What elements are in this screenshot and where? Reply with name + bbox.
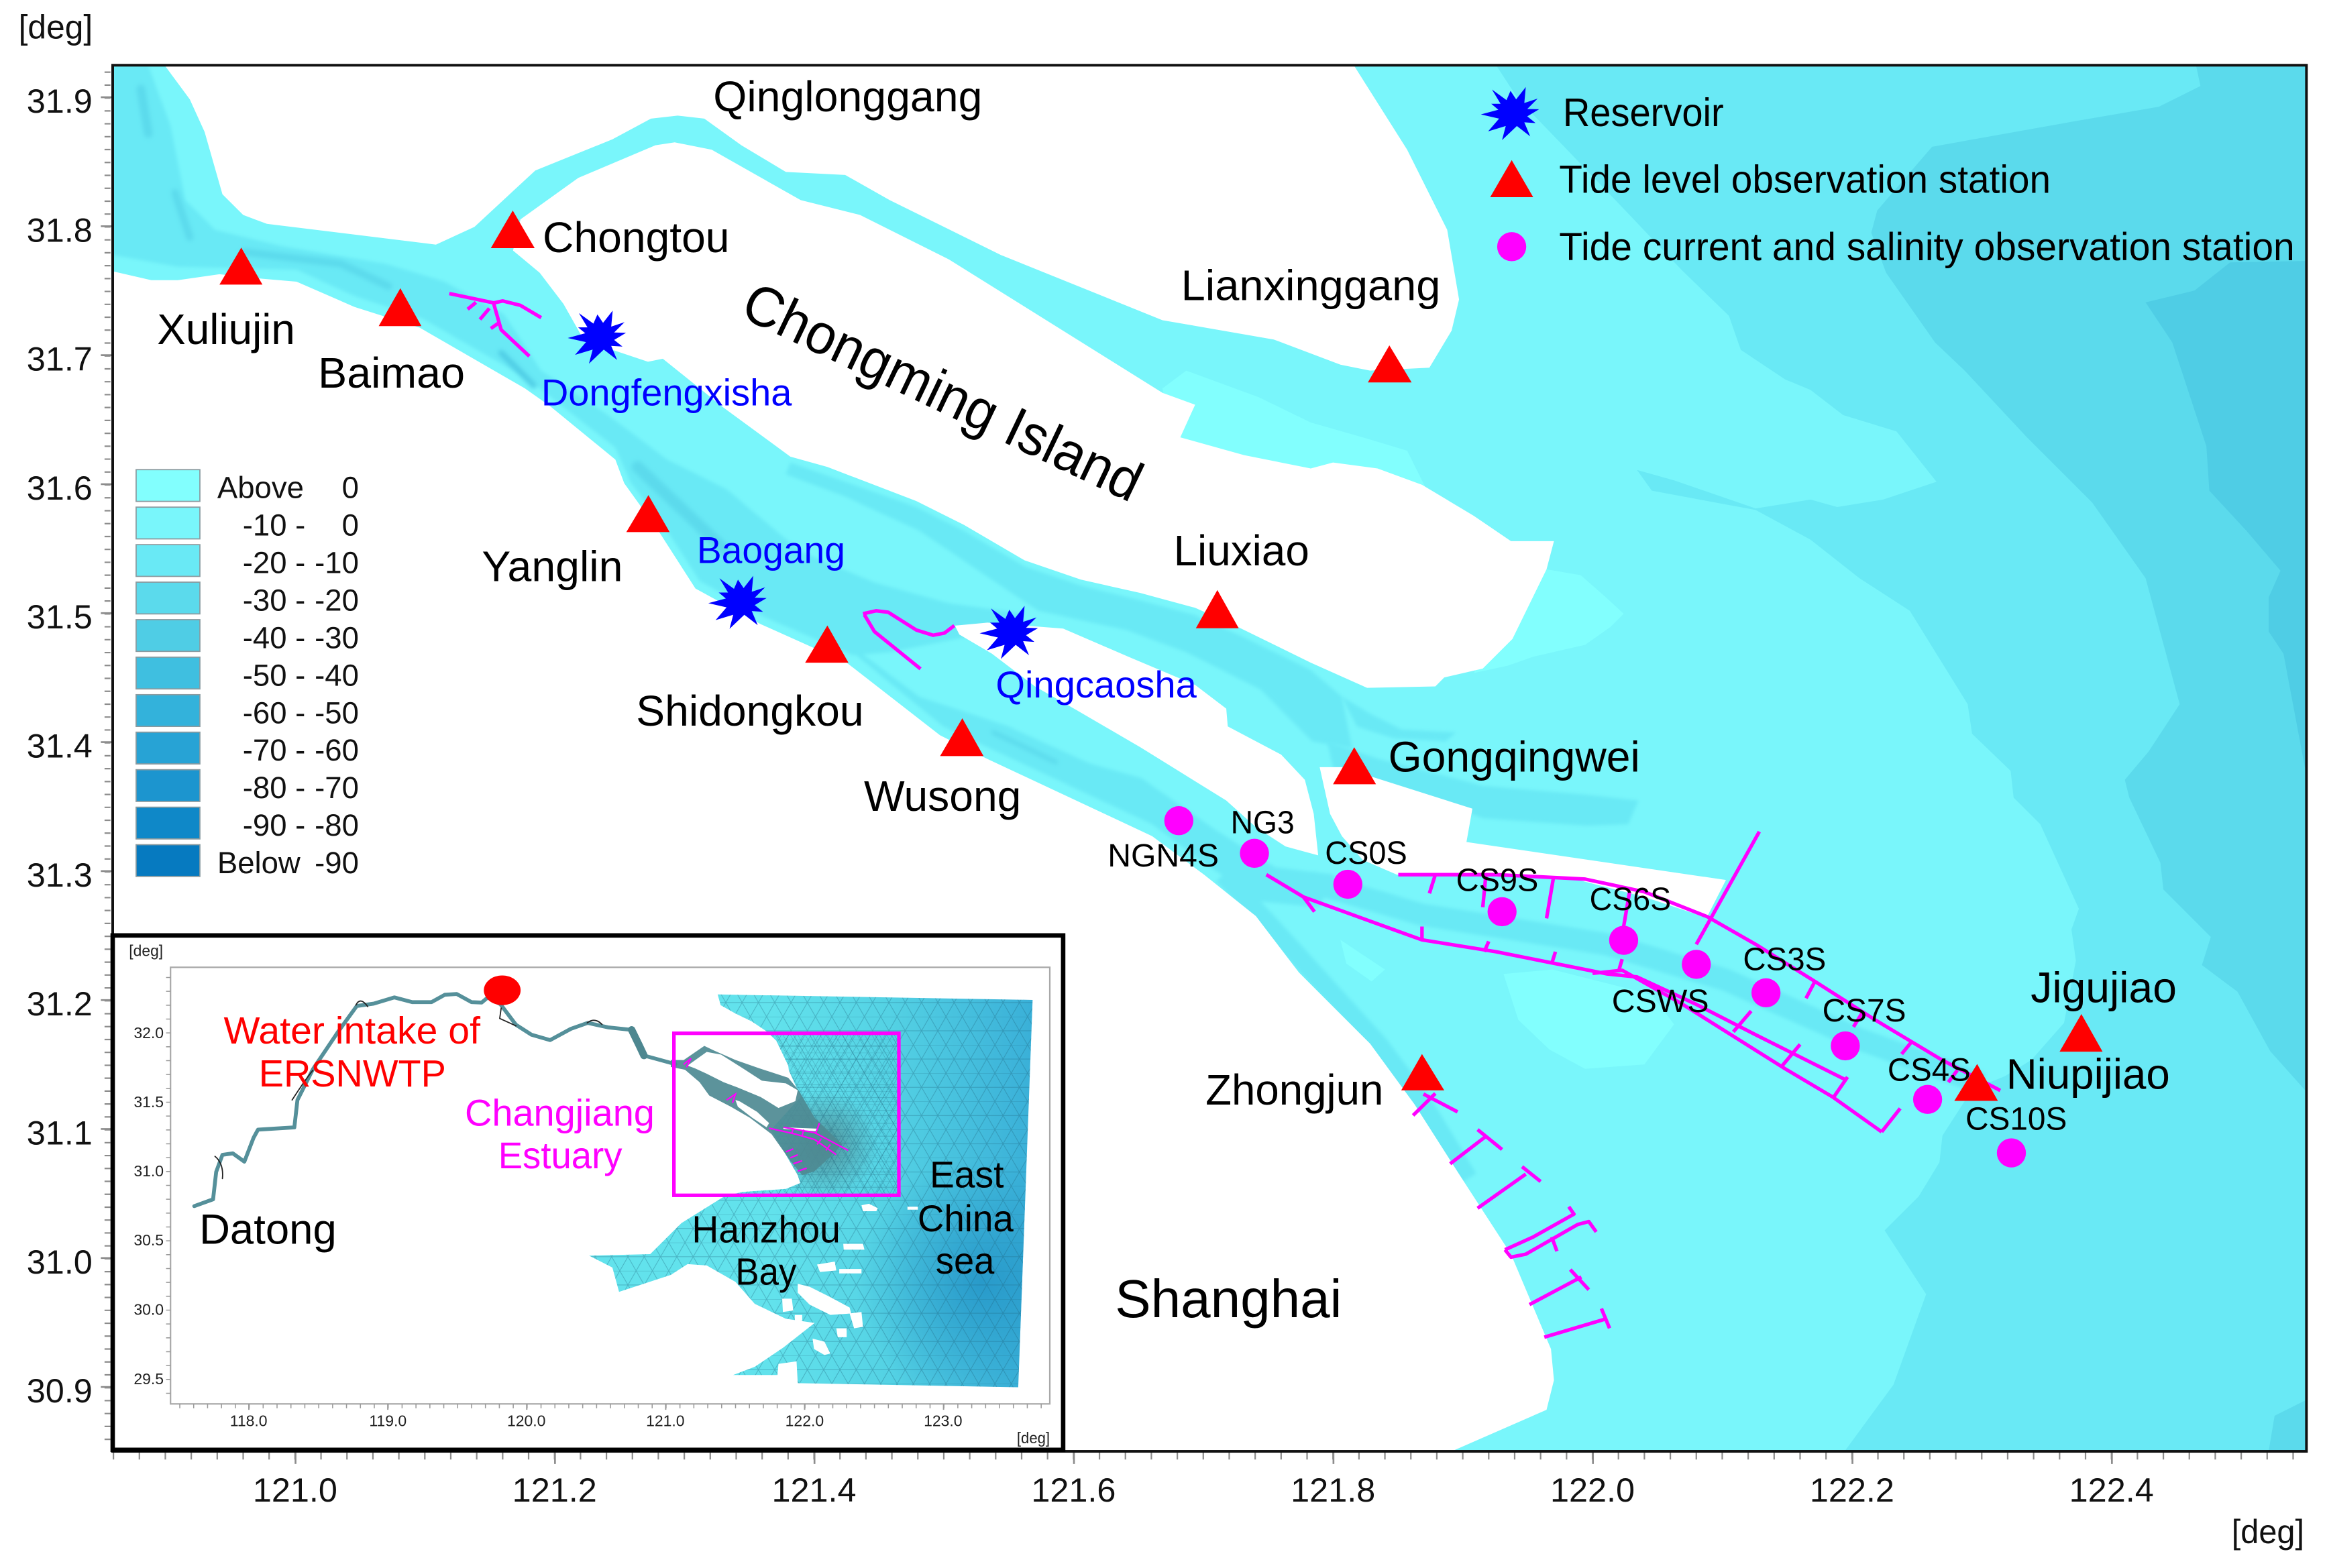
current and salinity station: CS9S <box>1456 862 1538 926</box>
river zone: south channel <box>763 611 1334 907</box>
reservoir: Dongfengxisha <box>541 311 792 413</box>
dikes: Deep Water Channel north dike <box>1398 832 2000 1090</box>
inset label: Hanzhou Bay: Hanzhou <box>692 1208 841 1250</box>
tide level station: Wusong <box>864 718 1021 820</box>
y axis labels: 31.3 <box>27 856 93 894</box>
reservoir: Qingcaosha <box>979 606 1197 706</box>
depth zone: -10 to 0 base water <box>114 66 2079 1450</box>
depth zone: -40 to -30 <box>2146 261 2307 780</box>
depth labels: -20 <box>315 583 359 617</box>
inset plot area <box>170 967 1050 1404</box>
current and salinity station: CS10S <box>1965 1101 2067 1168</box>
tide level station: Xuliujin: Xuliujin <box>157 305 295 353</box>
reservoir: Baogang: Baogang <box>697 528 845 571</box>
inset y labels: 32.0 <box>133 1024 164 1042</box>
river channel: deep zones <box>113 65 1982 1178</box>
legend item: reservoir <box>1481 87 1724 140</box>
tide level station: Baimao: Baimao <box>318 349 465 397</box>
tide level station: Liuxiao: Liuxiao <box>1174 526 1309 575</box>
inset label: East China sea <box>918 1154 1014 1282</box>
y axis labels: 30.9 <box>27 1371 93 1410</box>
inset x labels <box>230 1412 963 1429</box>
x axis labels: 121.0 <box>253 1471 337 1509</box>
inset y labels: 31.5 <box>133 1093 164 1111</box>
depth labels: -30 <box>315 620 359 655</box>
shoal: above 0 south of channel <box>1503 970 1674 1069</box>
depth labels: 0 <box>342 471 359 505</box>
mesh islands: Zhoushan archipelago <box>782 1204 918 1355</box>
depth labels: -90 <box>315 846 359 880</box>
training dikes and groynes <box>449 294 2000 1337</box>
inset x labels: 120.0 <box>507 1412 545 1429</box>
inset y labels: 30.5 <box>133 1231 164 1249</box>
fine mesh lines <box>673 1033 900 1196</box>
current and salinity station: CS10S: CS10S <box>1965 1101 2067 1137</box>
inset label: water intake: ERSNWTP <box>259 1052 446 1095</box>
tide level station: Baimao <box>318 288 465 397</box>
inset river: Yangtze from Datong <box>195 994 675 1206</box>
mesh depth shading <box>855 1156 1107 1408</box>
bank patch: -20 north of Hengsha <box>1342 697 1456 741</box>
bank patch: -20 south of Jiuduan <box>1327 741 1639 826</box>
current and salinity station: CSWS <box>1612 950 1711 1019</box>
land: Hengsha island <box>1319 767 1726 917</box>
current and salinity station: CS0S: CS0S <box>1325 835 1407 871</box>
y axis labels: 31.5 <box>27 598 93 636</box>
legend item: tide current and salinity station: Tide current and salinity observation station <box>1559 225 2295 269</box>
depth swatches <box>136 469 200 877</box>
tide level station: Zhongjun: Zhongjun <box>1205 1066 1383 1114</box>
tide level station: Lianxinggang: Lianxinggang <box>1181 262 1440 310</box>
depth labels: -60 <box>315 733 359 767</box>
river zone: north channel <box>786 463 1352 748</box>
legend: station symbols <box>1481 87 2295 269</box>
inset ticks <box>168 977 1050 1407</box>
shoal: above 0 east of Chongming <box>1474 569 1623 673</box>
reservoir: Baogang <box>697 528 845 629</box>
tide level station: Xuliujin <box>157 247 295 353</box>
inset frame <box>113 936 1063 1450</box>
inset x unit: [deg] <box>1017 1429 1050 1447</box>
land: Qingcaosha / Changxing island <box>955 622 1318 855</box>
inset x labels: 123.0 <box>924 1412 963 1429</box>
x axis labels: 121.2 <box>512 1471 597 1509</box>
tide level station: Wusong: Wusong <box>864 772 1021 820</box>
depth labels: -10 - <box>243 508 305 543</box>
tide level station: Gongqingwei: Gongqingwei <box>1389 732 1640 781</box>
inset label: Hanzhou Bay <box>692 1208 841 1293</box>
current and salinity station: NG3 <box>1231 804 1295 868</box>
depth zone: -30 to -20 <box>1872 65 2307 1093</box>
inset x labels: 119.0 <box>369 1412 407 1429</box>
tide level station: Shidongkou: Shidongkou <box>636 687 864 735</box>
land: south bank and Shanghai <box>113 272 1554 1451</box>
land: Chongming Island <box>513 142 1554 688</box>
x axis labels <box>253 1471 2154 1509</box>
tide level station: Jigujiao: Jigujiao <box>2031 963 2177 1011</box>
depth labels: Below <box>217 846 301 880</box>
current and salinity station: CS9S: CS9S <box>1456 862 1538 898</box>
y axis unit: [deg] <box>19 7 93 46</box>
place label: Shanghai: Shanghai <box>1115 1269 1342 1329</box>
depth zone: -30 corner <box>2269 1400 2305 1450</box>
inset label: East China sea: East <box>930 1154 1004 1196</box>
depth labels: -50 <box>315 695 359 730</box>
inset x labels: 121.0 <box>646 1412 685 1429</box>
current and salinity station: CS4S <box>1888 1052 1971 1114</box>
dikes: Baimao shoal <box>449 294 541 356</box>
legend item: tide level station: Tide level observation station <box>1559 158 2051 201</box>
inset label: Changjiang Estuary: Changjiang <box>465 1092 655 1134</box>
x axis labels: 122.2 <box>1810 1471 1894 1509</box>
current and salinity station: CS6S: CS6S <box>1590 881 1671 917</box>
depth labels: -90 - <box>243 808 305 842</box>
depth labels: -70 - <box>243 733 305 767</box>
water intake marker <box>484 975 521 1005</box>
x axis labels: 121.4 <box>772 1471 857 1509</box>
tide level station: Liuxiao <box>1174 526 1309 628</box>
depth zone: -20 to -10 <box>1496 65 2307 1451</box>
inset label: East China sea: sea <box>936 1240 995 1282</box>
inset estuary channels <box>671 1046 843 1175</box>
mesh refinement shading near estuary <box>771 1091 878 1198</box>
inset island: Hengsha <box>783 1127 817 1131</box>
current and salinity station: CS3S: CS3S <box>1743 942 1826 978</box>
depth labels: -40 <box>315 658 359 692</box>
current and salinity station: CS7S <box>1823 993 1906 1060</box>
shoal: small above 0 patch <box>1340 940 1385 981</box>
inset x labels: 122.0 <box>786 1412 824 1429</box>
inset island: Chongming <box>688 1052 798 1108</box>
inset y labels: 30.0 <box>133 1301 164 1319</box>
tide level station: Shidongkou <box>636 626 864 735</box>
y axis labels: 31.9 <box>27 82 93 120</box>
x axis labels: 122.4 <box>2069 1471 2154 1509</box>
y axis labels: 31.1 <box>27 1113 93 1152</box>
x axis labels: 122.0 <box>1550 1471 1635 1509</box>
current and salinity station: CSWS: CSWS <box>1612 983 1709 1019</box>
inset study area box <box>674 1033 899 1195</box>
dikes: Deep Water Channel south dike <box>1266 875 1900 1132</box>
inset label: Hanzhou Bay: Bay <box>735 1251 796 1293</box>
river zone: upper main channel <box>113 65 1023 655</box>
x axis labels: 121.8 <box>1291 1471 1375 1509</box>
current and salinity station: CS4S: CS4S <box>1888 1052 1971 1088</box>
y axis labels: 31.2 <box>27 985 93 1023</box>
depth labels: 0 <box>342 508 359 543</box>
tide level station: Lianxinggang <box>1181 262 1440 382</box>
inset y labels: 31.0 <box>133 1162 164 1180</box>
inset label: East China sea: China <box>918 1198 1014 1239</box>
inset y labels: 29.5 <box>133 1370 164 1388</box>
y axis labels: 31.6 <box>27 469 93 507</box>
tide level station: Jigujiao <box>2031 963 2177 1052</box>
y axis labels: 31.0 <box>27 1243 93 1281</box>
y axis labels: 31.7 <box>27 340 93 378</box>
current and salinity station: NGN4S: NGN4S <box>1107 838 1219 874</box>
y axis labels <box>27 82 93 1410</box>
legend: depth scale <box>136 469 359 880</box>
dikes: Baogang shoal <box>863 611 955 669</box>
depth labels <box>217 471 359 880</box>
reservoir: Dongfengxisha: Dongfengxisha <box>541 371 792 413</box>
mesh domain: sea <box>589 995 1107 1408</box>
inset dikes <box>684 1058 848 1171</box>
x axis labels: 121.6 <box>1031 1471 1116 1509</box>
tide level station: Niupijiao: Niupijiao <box>2006 1050 2170 1099</box>
tide level station: Chongtou: Chongtou <box>543 213 730 262</box>
tide level station: Zhongjun <box>1205 1054 1444 1114</box>
inset label: Datong: Datong <box>199 1207 337 1253</box>
place label: Chongming Island: Chongming Island <box>733 270 1152 514</box>
x axis unit: [deg] <box>2232 1512 2304 1551</box>
inset label: water intake: Water intake of <box>224 1009 480 1052</box>
inset label: Changjiang Estuary: Estuary <box>498 1134 623 1176</box>
depth labels: -20 - <box>243 546 305 580</box>
depth labels: Above <box>217 471 304 505</box>
tide level station: Yanglin <box>482 495 669 590</box>
depth labels: -40 - <box>243 620 305 655</box>
depth labels: -30 - <box>243 583 305 617</box>
inset x labels: 118.0 <box>230 1412 268 1429</box>
depth labels: -50 - <box>243 658 305 692</box>
depth labels: -80 <box>315 808 359 842</box>
river channel: deepest patches <box>141 89 1056 762</box>
inset panel: model domain <box>113 936 1107 1450</box>
shoal: above 0 north of Chongming <box>1162 371 1426 489</box>
depth labels: -60 - <box>243 695 305 730</box>
place label: Qinglonggang: Qinglonggang <box>713 72 982 121</box>
depth labels: -70 <box>315 771 359 805</box>
reservoir: Qingcaosha: Qingcaosha <box>995 663 1197 706</box>
inset y labels <box>133 1024 164 1388</box>
y axis labels: 31.4 <box>27 727 93 765</box>
inset y unit: [deg] <box>129 942 163 960</box>
current and salinity station: NG3: NG3 <box>1231 804 1295 840</box>
current and salinity station: NGN4S <box>1107 806 1219 874</box>
inset label: water intake <box>224 1009 480 1095</box>
river zone: Shanghai shore channel <box>1224 875 1468 1178</box>
river zone: deep water channel <box>1311 882 1982 1084</box>
dikes: Shanghai coast groynes <box>1413 1093 1609 1337</box>
current and salinity station: CS0S <box>1325 835 1407 899</box>
legend item: reservoir: Reservoir <box>1563 90 1724 135</box>
current and salinity station: CS7S: CS7S <box>1823 993 1906 1029</box>
land: north bank <box>164 65 1459 371</box>
current and salinity station: CS3S <box>1743 942 1826 1007</box>
inset island: Qingcaosha <box>735 1100 769 1127</box>
depth labels: -80 - <box>243 771 305 805</box>
coarse mesh lines <box>589 995 1032 1388</box>
y axis labels: 31.8 <box>27 211 93 249</box>
current and salinity station: CS6S <box>1590 881 1671 955</box>
depth labels: -10 <box>315 546 359 580</box>
inset label: Changjiang Estuary <box>465 1092 655 1176</box>
tide level station: Yanglin: Yanglin <box>482 542 623 590</box>
